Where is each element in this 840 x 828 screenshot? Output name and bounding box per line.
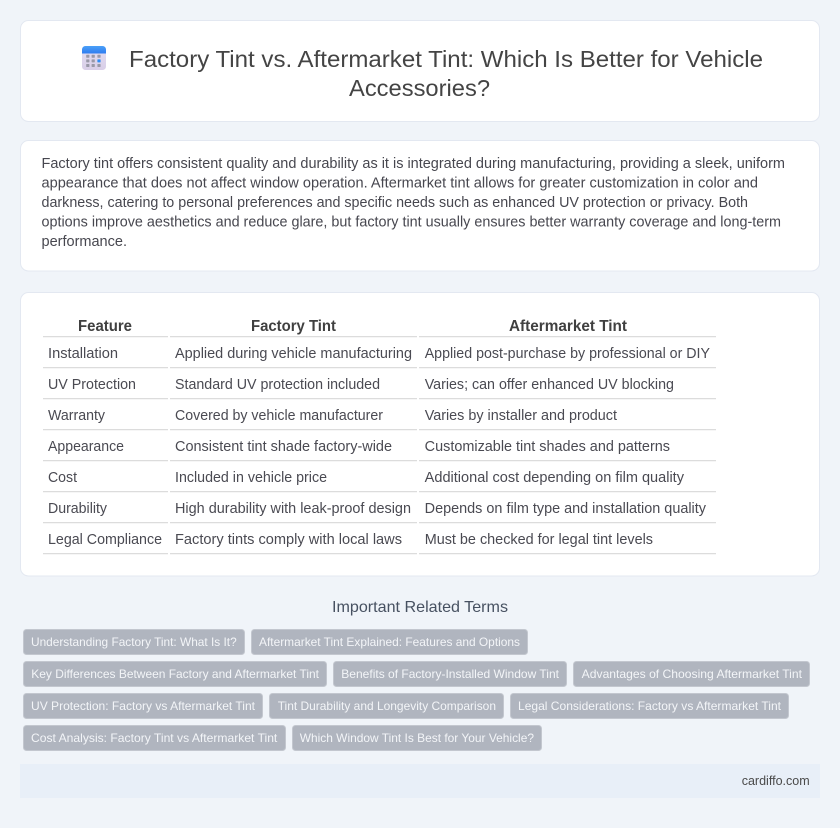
tag [574, 662, 810, 686]
table header row: Factory Tint [251, 318, 336, 335]
table row: legal compliance [48, 532, 653, 548]
tag [24, 694, 262, 718]
text block: summary paragraph [42, 156, 785, 250]
table row: appearance: Consistent tint shade factory-wide [175, 439, 392, 455]
table row: UV protection [48, 377, 674, 393]
tag: Tint Durability and Longevity Comparison [278, 699, 496, 713]
panel: related term tags [24, 630, 810, 750]
panel: intro summary [20, 140, 820, 271]
table row: appearance [48, 439, 670, 455]
panel: footer [20, 764, 820, 798]
table row: installation [48, 346, 710, 362]
table row: warranty [48, 408, 617, 424]
text block: summary paragraph: options improve aesthetics and reduce glare, but factory tint usually ensures better warranty coverage and long-term [42, 215, 781, 231]
tag: Understanding Factory Tint: What Is It? [31, 635, 237, 649]
table row: durability: Durability [48, 501, 108, 517]
text block: summary paragraph: appearance that does not affect window operation. Aftermarket tint allows for greater customization in color and [42, 176, 758, 192]
table row: warranty: Warranty [48, 408, 106, 424]
tag: Legal Considerations: Factory vs Aftermarket Tint [518, 699, 782, 713]
table row: installation: Installation [48, 346, 118, 362]
table header row: Aftermarket Tint [509, 318, 627, 335]
tag [270, 694, 504, 718]
tag: Cost Analysis: Factory Tint vs Aftermarket Tint [31, 731, 278, 745]
title: Factory Tint vs. Aftermarket Tint: Which Is Better for Vehicle [129, 46, 763, 72]
tag [24, 662, 326, 686]
table header row [78, 318, 627, 335]
table row: UV protection: Varies; can offer enhanced UV blocking [425, 377, 674, 393]
table row: warranty: Varies by installer and product [425, 408, 617, 424]
tag: Advantages of Choosing Aftermarket Tint [582, 667, 803, 681]
text block: summary paragraph: performance. [42, 234, 127, 250]
tag: Which Window Tint Is Best for Your Vehicle? [300, 731, 534, 745]
panel: comparison table [20, 292, 820, 576]
tag [252, 630, 528, 654]
table row: appearance: Customizable tint shades and patterns [425, 439, 670, 455]
tag: Key Differences Between Factory and Aftermarket Tint [31, 667, 320, 681]
table row: appearance: Appearance [48, 439, 124, 455]
table row: durability: Depends on film type and installation quality [425, 501, 707, 517]
heading: important related terms: Important Related Terms [332, 599, 508, 616]
title: Accessories? [349, 75, 490, 101]
tag [510, 694, 788, 718]
tag [292, 726, 542, 750]
table row: cost: Cost [48, 470, 77, 486]
icon: calendar grid [82, 46, 106, 70]
table row: warranty: Covered by vehicle manufacturer [175, 408, 383, 424]
table row: legal compliance: Legal Compliance [48, 532, 162, 548]
tag: UV Protection: Factory vs Aftermarket Tint [31, 699, 256, 713]
table row: durability: High durability with leak-proof design [175, 501, 411, 517]
table row: durability [48, 501, 707, 517]
table row: installation: Applied post-purchase by professional or DIY [425, 346, 710, 362]
tag: Aftermarket Tint Explained: Features and Options [259, 635, 520, 649]
table row: legal compliance: Factory tints comply with local laws [175, 532, 402, 548]
table row: cost: Additional cost depending on film quality [425, 470, 685, 486]
tag: Benefits of Factory-Installed Window Tint [341, 667, 560, 681]
table row: UV protection: UV Protection [48, 377, 136, 393]
title [129, 46, 763, 101]
table row: cost [48, 470, 685, 486]
tag [334, 662, 566, 686]
tag [24, 726, 286, 750]
table row: installation: Applied during vehicle manufacturing [175, 346, 412, 362]
table header row: Feature [78, 318, 132, 335]
table row: legal compliance: Must be checked for legal tint levels [425, 532, 653, 548]
text block: summary paragraph: darkness, catering to personal preferences and specific needs such as enhanced UV protection or privacy. Both [42, 195, 748, 211]
table row: UV protection: Standard UV protection included [175, 377, 380, 393]
tag [24, 630, 244, 654]
table row: cost: Included in vehicle price [175, 470, 327, 486]
text block: summary paragraph: Factory tint offers consistent quality and durability as it is integrated during manufacturing, providing a sleek, uniform [42, 156, 785, 172]
footer source text: cardiffo.com [742, 773, 810, 788]
panel: header [20, 20, 820, 122]
